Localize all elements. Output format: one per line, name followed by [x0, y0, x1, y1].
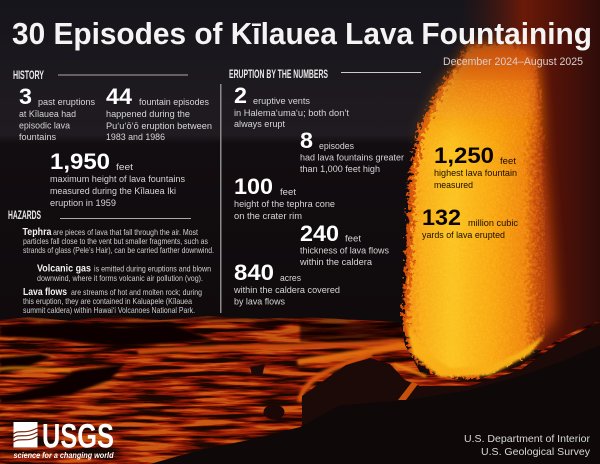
stat: 240 feet: thickness of lava flows: [300, 246, 389, 256]
USGS logo: [14, 418, 115, 460]
stat: 240 feet: 240: [300, 221, 339, 246]
USGS logo: science for a changing world: [14, 451, 115, 460]
stat: 3 past eruptions: past eruptions: [38, 97, 95, 108]
crater pit: [264, 404, 284, 420]
stat: 1,950 feet: feet: [116, 162, 133, 173]
stat: 1,950 feet: [50, 149, 185, 209]
hazard: volcanic gas: downwind, where it forms volcanic air pollution (vog).: [37, 274, 203, 283]
hazard: lava flows: this eruption, they are contained in Kaluapele (Kīlauea: [23, 297, 192, 306]
foreground black hillside: [150, 345, 600, 464]
hazard: tephra: particles fall close to the vent but smaller fragments, such as: [23, 237, 208, 246]
hazard: lava flows: [23, 287, 202, 315]
stat: 100 feet: [234, 174, 335, 222]
hazard: tephra: are pieces of lava that fall through the air. Most: [53, 228, 199, 237]
divider between columns: [220, 84, 222, 313]
dark cone: [302, 322, 600, 426]
stat: 1,950 feet: 1,950: [50, 149, 110, 174]
stat: 44 fountain episodes: 1983 and 1986: [106, 132, 165, 143]
stat: 2 eruptive vents: always erupt: [234, 119, 285, 130]
stat: 1,950 feet: eruption in 1959: [50, 198, 116, 209]
heading: eruption by the numbers: ERUPTION BY THE NUMBERS: [229, 67, 328, 81]
stat: 1,250 feet: feet: [500, 156, 516, 167]
stat: 840 acres: [233, 260, 340, 308]
stat: 1,250 feet: measured: [434, 180, 473, 191]
heading: history: HISTORY: [13, 68, 44, 82]
stat: 44 fountain episodes: [106, 84, 212, 143]
stat: 3 past eruptions: episodic lava: [19, 120, 71, 132]
stat: 8 episodes: had lava fountains greater: [300, 152, 405, 164]
hazard: lava flows: Lava flows: [23, 287, 67, 298]
background: dark red glow behind fountain: [440, 0, 600, 350]
stat: 1,950 feet: maximum height of lava fountains: [50, 174, 185, 185]
stat: 240 feet: feet: [345, 234, 361, 244]
stat: 2 eruptive vents: [234, 83, 349, 130]
dark cooled patches: [0, 322, 405, 403]
stat: 1,250 feet: [434, 143, 517, 191]
stat: 1,950 feet: measured during the Kīlauea Iki: [50, 186, 176, 197]
stat: 8 episodes: 8: [300, 128, 313, 153]
stat: 2 eruptive vents: eruptive vents: [253, 96, 310, 107]
hazard: tephra: strands of glass (Pele’s Hair), can be carried farther downwind.: [23, 246, 214, 255]
stat: 2 eruptive vents: 2: [234, 83, 247, 108]
bright lava streaks: [0, 342, 425, 400]
lava field ground: [0, 312, 600, 464]
stat: 132 million cubic yards: yards of lava erupted: [422, 230, 505, 241]
stat: 44 fountain episodes: 44: [106, 84, 133, 109]
stat: 3 past eruptions: at Kīlauea had: [19, 109, 76, 120]
stat: 8 episodes: [300, 128, 405, 175]
stat: 240 feet: [299, 221, 389, 268]
stat: 44 fountain episodes: happened during the: [106, 109, 190, 120]
date range: December 2024–August 2025: [443, 56, 583, 68]
stat: 100 feet: 100: [234, 174, 273, 199]
stat: 8 episodes: episodes: [319, 141, 354, 152]
stat: 100 feet: height of the tephra cone: [234, 199, 335, 210]
stat: 840 acres: within the caldera covered: [233, 285, 340, 296]
footer credit: U.S. Department of Interior: [464, 433, 591, 445]
lava fountain: [402, 42, 556, 380]
lava base glow: [406, 322, 545, 377]
stat: 3 past eruptions: [19, 84, 95, 143]
heading: hazards: HAZARDS: [8, 208, 41, 222]
stat: 100 feet: feet: [280, 187, 296, 198]
stat: 840 acres: by lava flows: [234, 296, 285, 308]
stat: 1,250 feet: highest lava fountain: [434, 168, 517, 179]
title: 30 Episodes of Kīlauea Lava Fountaining: [12, 16, 592, 51]
stat: 3 past eruptions: 3: [19, 84, 32, 109]
stat: 44 fountain episodes: fountain episodes: [139, 97, 209, 108]
hazard: tephra: Tephra: [22, 227, 52, 238]
stat: 132 million cubic yards: [422, 205, 518, 241]
stat: 3 past eruptions: fountains: [19, 132, 56, 143]
panel: history: [13, 68, 212, 209]
hazard: volcanic gas: [37, 264, 211, 283]
stat: 840 acres: 840: [234, 260, 274, 285]
footer credit: [464, 433, 591, 458]
USGS logo: USGS: [42, 418, 114, 456]
stat: 2 eruptive vents: in Halemaʻumaʻu; both don’t: [234, 108, 349, 119]
panel: eruption by the numbers: [229, 67, 518, 308]
hazard: volcanic gas: is emitted during eruptions and blown: [94, 264, 211, 274]
hazard: volcanic gas: Volcanic gas: [37, 264, 91, 274]
stat: 132 million cubic yards: million cubic: [468, 218, 518, 229]
hazard: lava flows: are streams of hot and molten rock; during: [71, 288, 202, 297]
stat: 100 feet: on the crater rim: [234, 211, 302, 222]
panel: hazards: [8, 208, 214, 315]
icon: USGS wave mark: [14, 422, 38, 448]
stat: 8 episodes: than 1,000 feet high: [300, 164, 380, 175]
stat: 840 acres: acres: [280, 273, 301, 284]
stat: 1,250 feet: 1,250: [434, 143, 494, 168]
stat: 132 million cubic yards: 132: [422, 205, 461, 230]
hazard: tephra: [22, 227, 214, 255]
hazard: lava flows: summit caldera) within Hawaiʻi Volcanoes National Park.: [23, 306, 195, 315]
stat: 44 fountain episodes: Puʻuʻōʻō eruption between: [106, 121, 212, 132]
stat: 240 feet: within the caldera: [299, 257, 373, 268]
footer credit: U.S. Geological Survey: [481, 446, 591, 458]
